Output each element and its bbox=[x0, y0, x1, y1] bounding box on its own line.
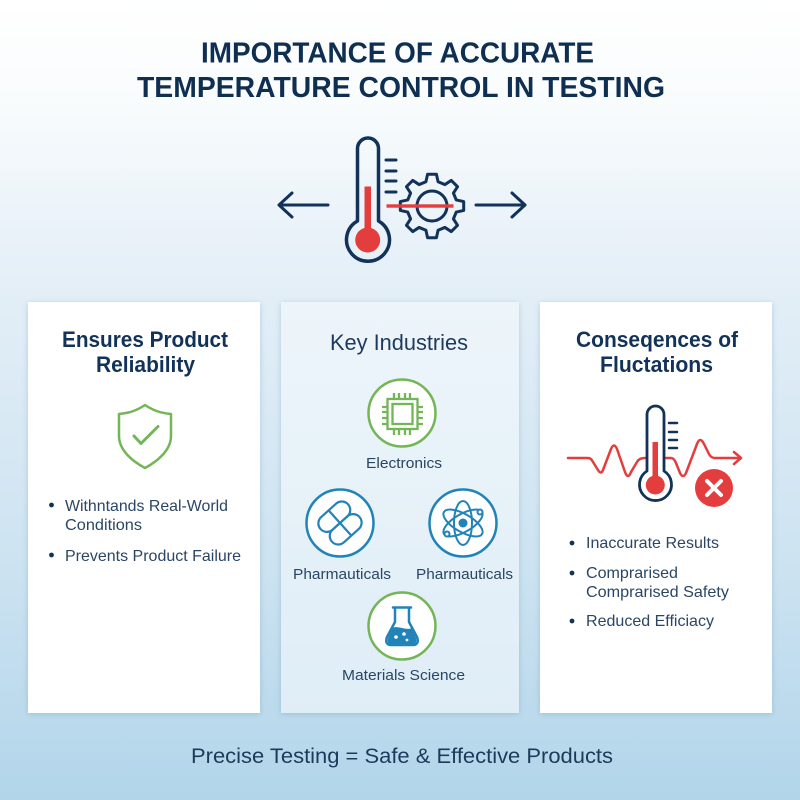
icon: shield with check bbox=[119, 405, 171, 468]
heading: Conseqences of bbox=[576, 327, 739, 352]
thermometer bbox=[639, 406, 677, 501]
icon: error cross bbox=[695, 469, 733, 507]
heading: Reliability bbox=[96, 352, 196, 377]
heading: Fluctations bbox=[600, 352, 713, 377]
icon: atom bbox=[430, 490, 496, 556]
heading: Ensures Product bbox=[62, 327, 229, 352]
bullet list: Withntands Real-World bbox=[65, 498, 228, 515]
heading bbox=[62, 327, 229, 377]
title: IMPORTANCE OF ACCURATE bbox=[201, 38, 594, 70]
label: Materials Science bbox=[342, 668, 465, 684]
heading bbox=[576, 327, 739, 377]
icon: electronics chip bbox=[368, 380, 436, 446]
red indicator line bbox=[386, 204, 454, 208]
bullet list: Reduced Efficiacy bbox=[586, 613, 714, 630]
bullet list: Comprarised Safety bbox=[586, 584, 729, 601]
label: Pharmauticals bbox=[293, 567, 391, 583]
panel: consequences of fluctuations bbox=[540, 302, 772, 713]
gear bbox=[400, 174, 464, 238]
thermometer bbox=[346, 138, 396, 261]
arrow: left bbox=[279, 193, 328, 217]
arrow: right bbox=[476, 193, 525, 217]
icon: fluctuating temperature bbox=[568, 406, 741, 507]
bullet list: Inaccurate Results bbox=[586, 535, 719, 552]
bullet list: Prevents Product Failure bbox=[65, 548, 241, 565]
icon: thermometer with gear and arrows bbox=[279, 138, 525, 261]
label: Pharmauticals bbox=[416, 567, 513, 583]
label: Electronics bbox=[366, 456, 442, 472]
bullet list: Comprarised bbox=[586, 565, 678, 582]
icon: pills bbox=[306, 490, 374, 556]
bullet list: Conditions bbox=[65, 517, 142, 534]
panel: ensures product reliability bbox=[28, 302, 260, 713]
heading: Key Industries bbox=[330, 330, 468, 355]
wave line bbox=[568, 440, 741, 476]
footer text: Precise Testing = Safe & Effective Products bbox=[191, 745, 613, 768]
icon: flask bbox=[368, 592, 436, 660]
bullet list bbox=[570, 535, 729, 630]
bullet list bbox=[49, 498, 241, 565]
title: TEMPERATURE CONTROL IN TESTING bbox=[137, 72, 665, 104]
panel: key industries bbox=[281, 302, 519, 713]
title bbox=[137, 38, 665, 104]
